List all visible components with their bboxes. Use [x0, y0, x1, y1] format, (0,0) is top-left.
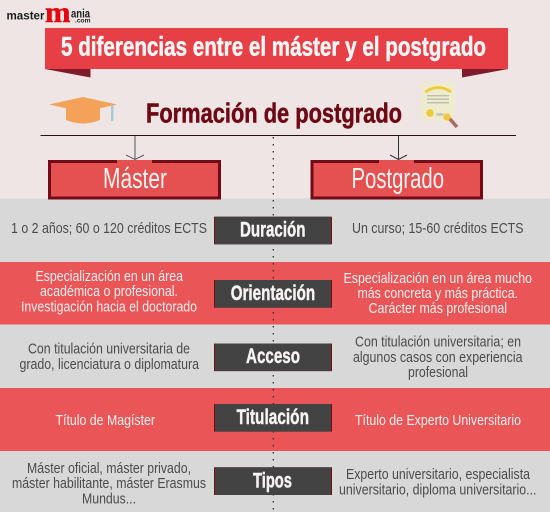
- band: titulación row: [0, 388, 550, 451]
- text: postgrado orientación: [344, 270, 532, 317]
- text: máster orientación: Investigación hacia el doctorado: [21, 298, 197, 316]
- text: postgrado tipos: [339, 466, 536, 498]
- title banner: [45, 28, 508, 78]
- label: titulación: Titulación: [236, 406, 309, 429]
- panel: postgrado header: Postgrado: [352, 163, 444, 195]
- text: máster acceso: Con titulación universitaria de: [28, 340, 190, 358]
- label: duración: [214, 217, 332, 244]
- text: postgrado acceso: profesional: [408, 364, 468, 381]
- icon: graduation cap: [49, 97, 117, 124]
- panel: máster header: [50, 160, 220, 198]
- text: postgrado orientación: más concreta y más práctica.: [358, 285, 518, 302]
- label: tipos: [214, 467, 332, 495]
- label: duración: Duración: [240, 218, 306, 242]
- text: máster orientación: [21, 268, 197, 316]
- text: postgrado acceso: [353, 334, 523, 381]
- label: orientación: [214, 280, 332, 308]
- divider line: [40, 134, 516, 136]
- row: titulación: [56, 404, 521, 432]
- text: máster duración: 1 o 2 años; 60 o 120 créditos ECTS: [11, 220, 207, 237]
- logo: mastermania: .com: [75, 18, 90, 24]
- text: postgrado acceso: Con titulación universitaria; en: [355, 334, 521, 350]
- text: máster tipos: [12, 460, 206, 508]
- label: titulación: [214, 404, 332, 432]
- text: máster orientación: académica o profesional.: [40, 283, 178, 300]
- label: tipos: Tipos: [253, 470, 292, 492]
- heading: formación de postgrado: Formación de postgrado: [146, 98, 402, 128]
- text: máster tipos: Máster oficial, máster privado,: [27, 460, 191, 477]
- logo: mastermania: [6, 0, 90, 29]
- text: máster tipos: Mundus...: [82, 490, 136, 508]
- arrow: to máster: [126, 136, 144, 160]
- band: orientación row: [0, 262, 550, 324]
- logo: mastermania: ania: [71, 8, 90, 20]
- logo: mastermania: master: [6, 10, 45, 22]
- panel: postgrado header: [312, 160, 482, 198]
- text: máster titulación: Título de Magíster: [56, 412, 155, 429]
- label: orientación: Orientación: [231, 282, 315, 305]
- panel: máster header: Máster: [103, 163, 167, 195]
- text: máster acceso: [20, 340, 200, 373]
- text: máster acceso: grado, licenciatura o diplomatura: [20, 356, 200, 373]
- text: máster tipos: máster habilitante, máster Erasmus: [12, 475, 206, 492]
- label: acceso: [214, 344, 332, 371]
- row: tipos: [12, 460, 536, 508]
- text: máster orientación: Especialización en un área: [36, 268, 184, 285]
- arrow: to postgrado: [390, 136, 407, 160]
- row: orientación: [21, 268, 532, 317]
- label: acceso: Acceso: [246, 345, 300, 368]
- row: acceso: [20, 334, 523, 381]
- icon: certificate: [421, 83, 457, 127]
- row: duración: [11, 217, 524, 244]
- text: postgrado orientación: Carácter más profesional: [368, 300, 507, 317]
